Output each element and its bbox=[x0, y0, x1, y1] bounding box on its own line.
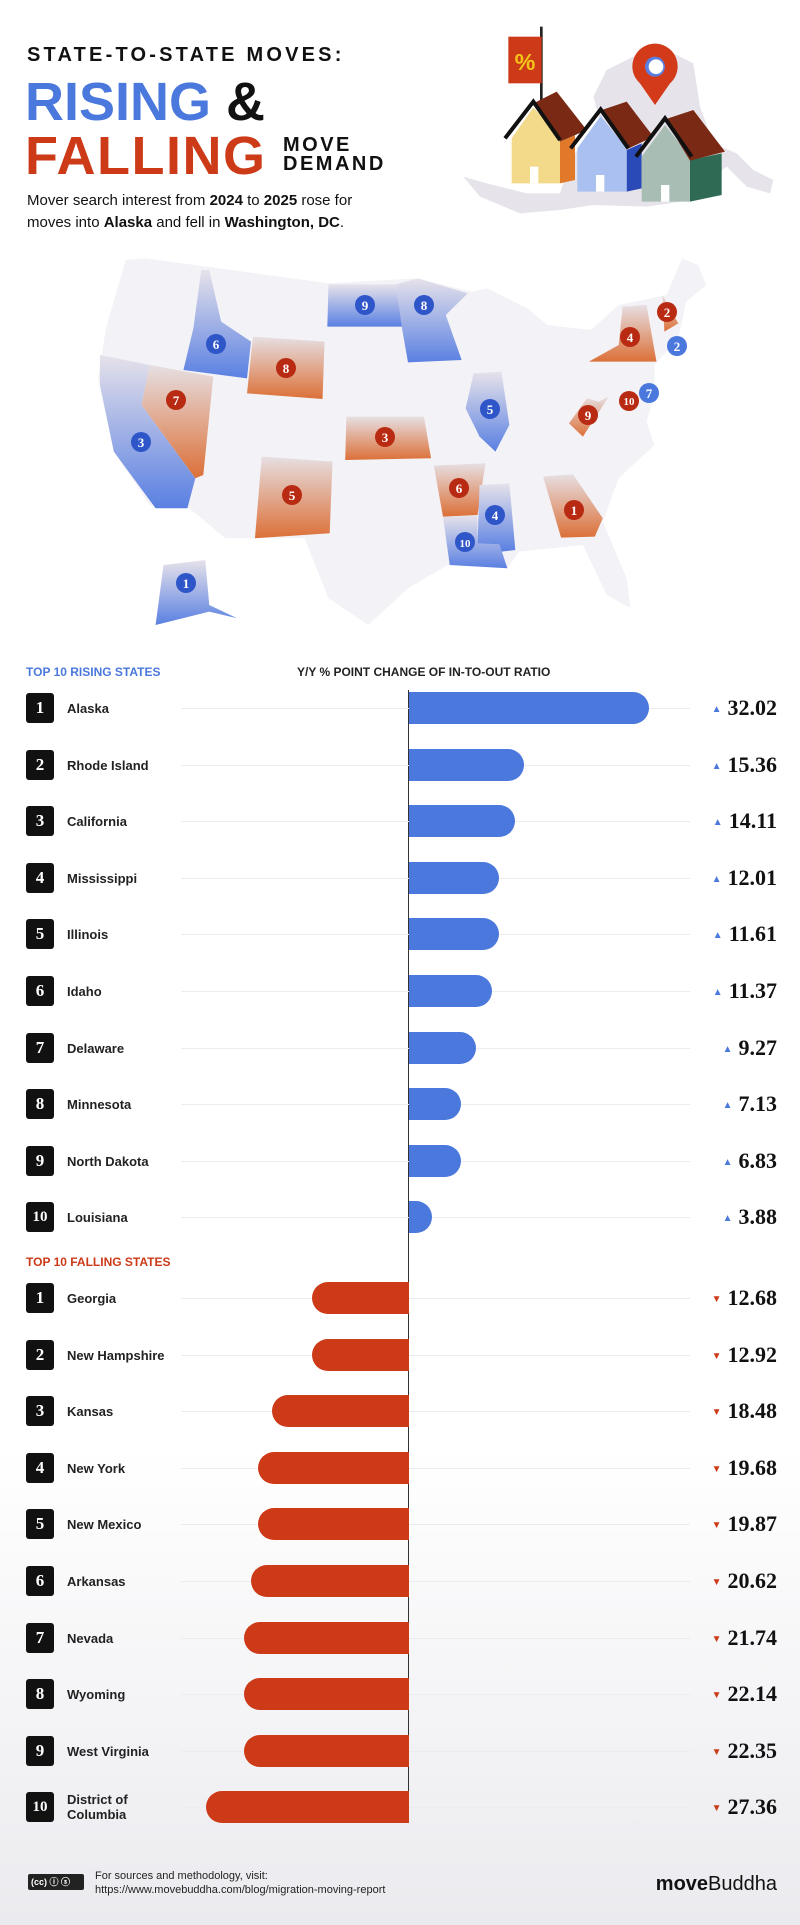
row 7 Nevada: ▼ 21.74 bbox=[712, 1625, 777, 1650]
row 5 Illinois: 5 bbox=[36, 924, 44, 943]
marker CA 3 bbox=[131, 432, 151, 452]
title: move demand: MOVE bbox=[283, 134, 352, 156]
state: New Mexico bbox=[255, 457, 332, 538]
row 3 California bbox=[26, 805, 777, 837]
state: Nevada bbox=[142, 365, 213, 478]
axis title: Y/Y % POINT CHANGE OF IN-TO-OUT RATIO bbox=[297, 665, 550, 679]
title: move demand: DEMAND bbox=[283, 153, 386, 175]
row 6 Arkansas: 6 bbox=[36, 1571, 44, 1590]
green house bbox=[636, 110, 725, 202]
us outline bbox=[98, 258, 706, 625]
row 5 Illinois: Illinois bbox=[67, 927, 108, 942]
marker MD 10 bbox=[619, 391, 639, 411]
marker RI 2 bbox=[667, 336, 687, 356]
bar chart: rising states bbox=[26, 692, 777, 1233]
marker MN 8: 8 bbox=[421, 298, 428, 313]
row 2 Rhode Island bbox=[26, 749, 777, 781]
marker WV 9: 9 bbox=[585, 408, 592, 423]
row 10 Louisiana: Louisiana bbox=[67, 1210, 128, 1225]
marker KS 3 bbox=[375, 427, 395, 447]
marker AR 6 bbox=[449, 478, 469, 498]
row 10 Louisiana: ▲ 3.88 bbox=[723, 1204, 777, 1229]
state: New York bbox=[589, 305, 656, 362]
marker IL 5: 5 bbox=[487, 402, 494, 417]
row 5 New Mexico bbox=[26, 1508, 777, 1540]
row 5 New Mexico: 5 bbox=[36, 1514, 44, 1533]
subtitle: Mover search interest from 2024 to 2025 rose for moves into Alaska and fell in Washington, DC. bbox=[27, 192, 352, 231]
state: California bbox=[100, 355, 195, 508]
row 1 Georgia: 1 bbox=[36, 1288, 44, 1307]
row 8 Minnesota bbox=[26, 1088, 777, 1120]
marker DE 7: 7 bbox=[646, 386, 653, 401]
marker NY 4 bbox=[620, 327, 640, 347]
row 4 New York: 4 bbox=[36, 1458, 44, 1477]
row 9 West Virginia: 9 bbox=[36, 1741, 44, 1760]
marker ID 6 bbox=[206, 334, 226, 354]
row 6 Arkansas bbox=[26, 1565, 777, 1597]
row 8 Wyoming bbox=[26, 1678, 777, 1710]
footer bbox=[28, 1870, 777, 1896]
state: Kansas bbox=[345, 417, 431, 460]
row 4 New York bbox=[26, 1452, 777, 1484]
axis line bbox=[408, 690, 409, 1820]
marker GA 1 bbox=[564, 500, 584, 520]
marker AK 1 bbox=[176, 573, 196, 593]
row 4 Mississippi bbox=[26, 862, 777, 894]
source text bbox=[95, 1870, 386, 1896]
row 8 Minnesota: 8 bbox=[36, 1094, 44, 1113]
marker CA 3: 3 bbox=[138, 435, 145, 450]
row 10 District of Columbia: ▼ 27.36 bbox=[712, 1794, 777, 1819]
state: Arkansas bbox=[434, 463, 486, 517]
row 10 Louisiana: 10 bbox=[32, 1209, 48, 1225]
row 9 West Virginia bbox=[26, 1735, 777, 1767]
marker WY 8: 8 bbox=[283, 361, 290, 376]
row 7 Delaware: Delaware bbox=[67, 1041, 124, 1056]
row 7 Delaware bbox=[26, 1032, 777, 1064]
blue house bbox=[571, 102, 653, 192]
row 9 West Virginia: ▼ 22.35 bbox=[712, 1738, 777, 1763]
marker MS 4: 4 bbox=[492, 508, 499, 523]
state: Wyoming bbox=[247, 337, 325, 399]
row 2 Rhode Island: Rhode Island bbox=[67, 758, 149, 773]
marker GA 1: 1 bbox=[571, 503, 577, 518]
icon: creative commons: (cc) ⓘ ⓢ bbox=[31, 1877, 70, 1887]
marker LA 10: 10 bbox=[460, 538, 471, 550]
row 5 New Mexico: ▼ 19.87 bbox=[712, 1511, 777, 1536]
row 8 Wyoming: Wyoming bbox=[67, 1687, 125, 1702]
row 4 New York: ▼ 19.68 bbox=[712, 1455, 777, 1480]
row 3 Kansas: Kansas bbox=[67, 1404, 113, 1419]
source text: https://www.movebuddha.com/blog/migration-moving-report bbox=[95, 1884, 385, 1896]
title: falling: FALLING bbox=[25, 126, 266, 186]
row 7 Delaware: 7 bbox=[36, 1038, 44, 1057]
marker NY 4: 4 bbox=[627, 330, 634, 345]
row 7 Nevada: Nevada bbox=[67, 1631, 113, 1646]
state: Louisiana bbox=[443, 516, 507, 568]
map: US states bbox=[98, 258, 706, 625]
illustration: houses over alaska bbox=[464, 26, 774, 214]
row 1 Alaska: Alaska bbox=[67, 701, 109, 716]
row 9 North Dakota: North Dakota bbox=[67, 1154, 149, 1169]
row 5 Illinois: ▲ 11.61 bbox=[713, 921, 777, 946]
row 3 California: ▲ 14.11 bbox=[713, 808, 777, 833]
state: Mississippi bbox=[478, 483, 515, 552]
flag bbox=[508, 27, 543, 100]
row 10 District of Columbia bbox=[26, 1791, 777, 1823]
title: kicker: STATE-TO-STATE MOVES: bbox=[27, 44, 345, 66]
row 1 Georgia bbox=[26, 1282, 777, 1314]
marker AR 6: 6 bbox=[456, 481, 463, 496]
row 9 North Dakota: 9 bbox=[36, 1151, 44, 1170]
marker MD 10: 10 bbox=[624, 396, 635, 408]
row 2 Rhode Island: 2 bbox=[36, 755, 44, 774]
row 4 Mississippi: 4 bbox=[36, 868, 44, 887]
row 9 North Dakota: ▲ 6.83 bbox=[723, 1148, 777, 1173]
title block bbox=[25, 44, 386, 231]
row 6 Arkansas: Arkansas bbox=[67, 1574, 126, 1589]
row 8 Wyoming: 8 bbox=[36, 1684, 44, 1703]
marker WV 9 bbox=[578, 405, 598, 425]
row 6 Idaho: ▲ 11.37 bbox=[713, 978, 777, 1003]
state: Georgia bbox=[543, 474, 603, 538]
row 10 District of Columbia: 10 bbox=[32, 1799, 48, 1815]
marker AK 1: 1 bbox=[183, 576, 189, 591]
row 3 Kansas: 3 bbox=[36, 1401, 44, 1420]
state: Idaho bbox=[183, 270, 251, 378]
row 2 New Hampshire bbox=[26, 1339, 777, 1371]
row 2 New Hampshire: 2 bbox=[36, 1345, 44, 1364]
row 1 Alaska: ▲ 32.02 bbox=[712, 695, 777, 720]
row 3 Kansas bbox=[26, 1395, 777, 1427]
marker NH 2: 2 bbox=[664, 305, 670, 320]
row 2 Rhode Island: ▲ 15.36 bbox=[712, 752, 777, 777]
chart header: falling: TOP 10 FALLING STATES bbox=[26, 1255, 170, 1269]
row 10 District of Columbia: Columbia bbox=[67, 1807, 126, 1822]
row 4 New York: New York bbox=[67, 1461, 125, 1476]
source text: For sources and methodology, visit: bbox=[95, 1870, 268, 1882]
pin bbox=[632, 44, 678, 105]
row 2 New Hampshire: ▼ 12.92 bbox=[712, 1342, 777, 1367]
row 7 Delaware: ▲ 9.27 bbox=[723, 1035, 777, 1060]
flag: % bbox=[515, 49, 536, 75]
marker MN 8 bbox=[414, 295, 434, 315]
row 1 Alaska bbox=[26, 692, 777, 724]
state: Illinois bbox=[466, 372, 509, 452]
marker ID 6: 6 bbox=[213, 337, 220, 352]
marker IL 5 bbox=[480, 399, 500, 419]
icon: creative commons bbox=[28, 1874, 84, 1890]
marker NV 7 bbox=[166, 390, 186, 410]
marker LA 10 bbox=[455, 532, 475, 552]
yellow house bbox=[505, 92, 587, 183]
marker ND 9 bbox=[355, 295, 375, 315]
row 6 Idaho bbox=[26, 975, 777, 1007]
marker NM 5: 5 bbox=[289, 488, 296, 503]
row 9 West Virginia: West Virginia bbox=[67, 1744, 149, 1759]
row 6 Idaho: Idaho bbox=[67, 984, 102, 999]
chart header: rising: TOP 10 RISING STATES bbox=[26, 665, 160, 679]
state: New Hampshire bbox=[662, 295, 678, 332]
row 2 New Hampshire: New Hampshire bbox=[67, 1348, 165, 1363]
row 4 Mississippi: Mississippi bbox=[67, 871, 137, 886]
marker MS 4 bbox=[485, 505, 505, 525]
row 6 Idaho: 6 bbox=[36, 981, 44, 1000]
row 5 New Mexico: New Mexico bbox=[67, 1517, 141, 1532]
marker DE 7 bbox=[639, 383, 659, 403]
row 3 California: California bbox=[67, 814, 127, 829]
row 5 Illinois bbox=[26, 918, 777, 950]
row 7 Nevada: 7 bbox=[36, 1628, 44, 1647]
bar chart: falling states bbox=[26, 1282, 777, 1823]
marker NV 7: 7 bbox=[173, 393, 180, 408]
marker WY 8 bbox=[276, 358, 296, 378]
state: Alaska bbox=[156, 560, 237, 625]
row 10 District of Columbia: District of bbox=[67, 1792, 128, 1807]
row 8 Wyoming: ▼ 22.14 bbox=[712, 1681, 777, 1706]
state: North Dakota bbox=[327, 284, 402, 327]
row 1 Georgia: Georgia bbox=[67, 1291, 116, 1306]
marker KS 3: 3 bbox=[382, 430, 389, 445]
marker RI 2: 2 bbox=[674, 339, 680, 354]
state: West Virginia bbox=[569, 397, 609, 437]
row 4 Mississippi: ▲ 12.01 bbox=[712, 865, 777, 890]
row 6 Arkansas: ▼ 20.62 bbox=[712, 1568, 777, 1593]
row 9 North Dakota bbox=[26, 1145, 777, 1177]
row 1 Alaska: 1 bbox=[36, 698, 44, 717]
row 7 Nevada bbox=[26, 1622, 777, 1654]
logo: moveBuddha bbox=[656, 1873, 777, 1895]
row 1 Georgia: ▼ 12.68 bbox=[712, 1285, 777, 1310]
title: move demand bbox=[283, 134, 386, 175]
row 3 California: 3 bbox=[36, 811, 44, 830]
marker NM 5 bbox=[282, 485, 302, 505]
state: Minnesota bbox=[396, 278, 468, 362]
row 10 Louisiana bbox=[26, 1201, 777, 1233]
title: rising: RISING & bbox=[25, 72, 265, 132]
row 8 Minnesota: ▲ 7.13 bbox=[723, 1091, 777, 1116]
marker NH 2 bbox=[657, 302, 677, 322]
row 8 Minnesota: Minnesota bbox=[67, 1097, 131, 1112]
marker ND 9: 9 bbox=[362, 298, 369, 313]
alaska silhouette bbox=[463, 53, 773, 213]
row 3 Kansas: ▼ 18.48 bbox=[712, 1398, 777, 1423]
